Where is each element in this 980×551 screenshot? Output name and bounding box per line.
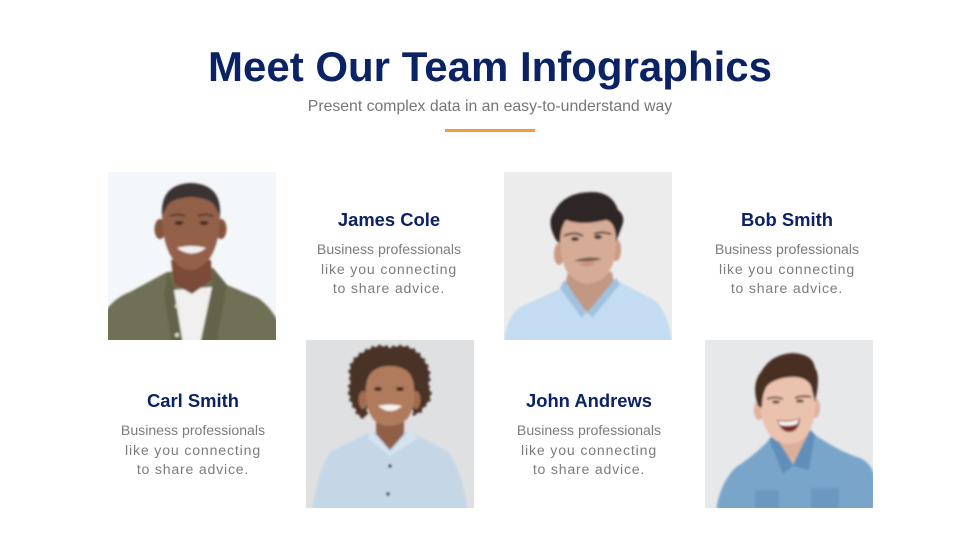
description: Business professionals bbox=[715, 241, 859, 257]
description bbox=[317, 241, 461, 296]
description: to share advice. bbox=[333, 280, 445, 296]
description bbox=[517, 422, 661, 477]
text block: James Cole bbox=[317, 209, 461, 296]
description: like you connecting bbox=[521, 442, 657, 458]
name: Carl Smith bbox=[147, 390, 239, 411]
description bbox=[121, 422, 265, 477]
photo: John Andrews portrait bbox=[306, 340, 474, 508]
subtitle: Present complex data in an easy-to-understand way bbox=[308, 98, 672, 115]
name: James Cole bbox=[338, 209, 440, 230]
description: like you connecting bbox=[719, 260, 855, 276]
name: Bob Smith bbox=[741, 209, 833, 230]
description: like you connecting bbox=[125, 442, 261, 458]
text block: John Andrews bbox=[517, 390, 661, 477]
description: like you connecting bbox=[321, 260, 457, 276]
description: Business professionals bbox=[317, 241, 461, 257]
description: Business professionals bbox=[517, 422, 661, 438]
photo: James Cole portrait bbox=[504, 172, 672, 340]
orange accent line bbox=[445, 129, 535, 132]
photo: Bob Smith portrait bbox=[705, 340, 873, 508]
text block: Carl Smith bbox=[121, 390, 265, 477]
description: to share advice. bbox=[533, 461, 645, 477]
text block: Bob Smith bbox=[715, 209, 859, 296]
description: to share advice. bbox=[137, 461, 249, 477]
name: John Andrews bbox=[526, 390, 652, 411]
photo: Carl Smith portrait bbox=[108, 172, 276, 340]
description: Business professionals bbox=[121, 422, 265, 438]
description bbox=[715, 241, 859, 296]
description: to share advice. bbox=[731, 280, 843, 296]
title: Meet Our Team Infographics bbox=[208, 43, 772, 90]
